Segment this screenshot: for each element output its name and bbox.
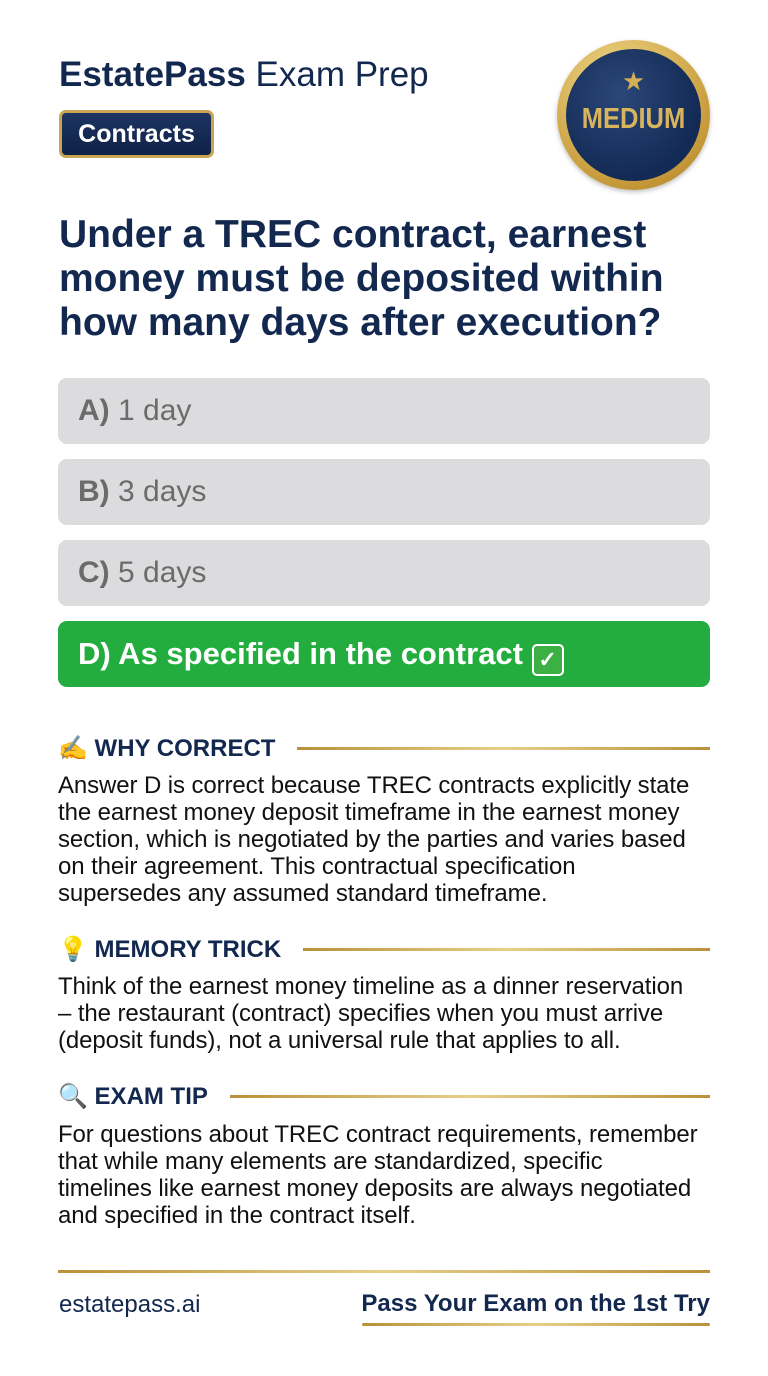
option D correct: ✓ — [538, 647, 557, 672]
category badge: Contracts — [78, 120, 195, 148]
heading: why correct: ✍ WHY CORRECT — [58, 735, 275, 762]
brand title: EstatePass Exam Prep — [59, 55, 429, 94]
text: exam tip: timelines like earnest money deposits are always negotiated — [58, 1175, 691, 1202]
option A: A) 1 day — [78, 394, 191, 427]
option C: C) 5 days — [78, 556, 206, 589]
text: memory trick — [58, 973, 683, 1054]
question — [59, 213, 664, 344]
text: memory trick: – the restaurant (contract) specifies when you must arrive — [58, 1000, 663, 1027]
option B: B) 3 days — [78, 475, 206, 508]
option D correct: D) As specified in the contract — [78, 636, 523, 671]
text: exam tip — [58, 1121, 698, 1229]
difficulty medal: MEDIUM — [582, 103, 685, 135]
footer url: estatepass.ai — [59, 1291, 200, 1318]
footer tagline: Pass Your Exam on the 1st Try — [361, 1290, 710, 1317]
text: why correct: section, which is negotiated by the parties and varies based — [58, 826, 686, 853]
heading: memory trick — [58, 936, 710, 963]
text: memory trick: (deposit funds), not a universal rule that applies to all. — [58, 1027, 621, 1054]
option B — [58, 459, 710, 525]
difficulty medal — [557, 40, 710, 190]
category badge — [59, 110, 214, 158]
option A — [58, 378, 710, 444]
question: how many days after execution? — [59, 301, 662, 344]
footer divider — [58, 1270, 710, 1273]
heading: why correct — [58, 735, 710, 762]
text: why correct — [58, 772, 689, 907]
option C — [58, 540, 710, 606]
text: why correct: the earnest money deposit timeframe in the earnest money — [58, 799, 679, 826]
question: money must be deposited within — [59, 257, 664, 300]
text: exam tip: For questions about TREC contract requirements, remember — [58, 1121, 698, 1148]
icon: star: ★ — [622, 66, 645, 96]
text: why correct: supersedes any assumed standard timeframe. — [58, 880, 547, 907]
heading: exam tip: 🔍 EXAM TIP — [58, 1083, 208, 1110]
question: Under a TREC contract, earnest — [59, 213, 646, 256]
heading: memory trick: 💡 MEMORY TRICK — [58, 936, 281, 963]
text: why correct: Answer D is correct because TREC contracts explicitly state — [58, 772, 689, 799]
text: exam tip: and specified in the contract itself. — [58, 1202, 416, 1229]
heading: exam tip — [58, 1082, 710, 1110]
option D correct — [58, 621, 710, 687]
text: memory trick: Think of the earnest money timeline as a dinner reservation — [58, 973, 683, 1000]
text: exam tip: that while many elements are standardized, specific — [58, 1148, 603, 1175]
text: why correct: on their agreement. This contractual specification — [58, 853, 576, 880]
